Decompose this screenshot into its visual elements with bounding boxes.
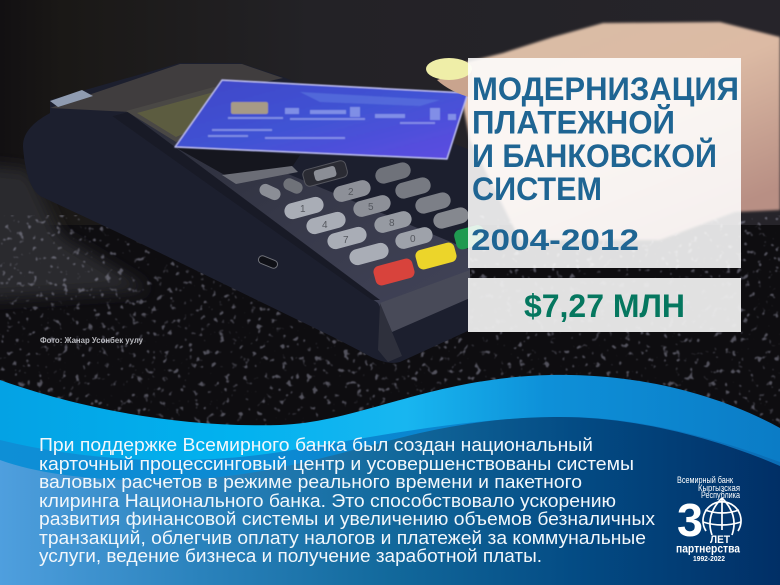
terminal keypad: 7 xyxy=(343,235,349,246)
fingernail xyxy=(426,58,472,80)
terminal keypad: 1 xyxy=(300,204,306,215)
logo: World Bank 30 years: Кыргызская xyxy=(698,483,740,493)
photo credit: Фото: Жанар Усонбек уулу xyxy=(40,335,143,345)
terminal top face xyxy=(112,110,470,330)
hand xyxy=(455,22,780,240)
terminal keypad: 2 xyxy=(348,187,354,198)
terminal lid xyxy=(50,64,283,112)
body text: развития финансовой системы и увеличению объемов безналичных xyxy=(39,508,656,529)
logo: World Bank 30 years xyxy=(676,475,741,563)
heading: И БАНКОВСКОЙ xyxy=(472,136,717,174)
body text: услуги, ведение бизнеса и получение заработной платы. xyxy=(39,545,542,566)
amount panel: $7,27 МЛН xyxy=(524,288,685,324)
amount panel xyxy=(468,278,741,332)
wave: mid blue band xyxy=(0,417,780,585)
wave: deep blue panel xyxy=(0,417,780,585)
globe icon xyxy=(703,498,741,535)
body text: транзакций, облегчив оплату налогов и платежей за коммунальные xyxy=(39,527,646,548)
logo: World Bank 30 years: 1992-2022 xyxy=(693,554,725,563)
terminal keypad: 5 xyxy=(368,202,374,213)
body text: При поддержке Всемирного банка был создан национальный xyxy=(39,434,593,455)
body text: валовых расчетов в режиме реального времени и пакетного xyxy=(39,471,582,492)
body text: клиринга Национального банка. Это способствовало ускорению xyxy=(39,490,616,511)
logo: World Bank 30 years: Всемирный банк xyxy=(677,475,733,485)
heading xyxy=(472,71,739,207)
terminal keypad: 4 xyxy=(322,220,328,231)
terminal keypad: 8 xyxy=(389,218,395,229)
logo: World Bank 30 years: партнерства xyxy=(676,544,741,556)
finger xyxy=(437,68,472,98)
body text xyxy=(39,434,656,566)
terminal body xyxy=(23,63,470,363)
heading: ПЛАТЕЖНОЙ xyxy=(472,102,675,140)
logo: World Bank 30 years: Республика xyxy=(701,490,740,500)
terminal keypad xyxy=(257,160,487,287)
big 3: 3 xyxy=(677,494,703,546)
card xyxy=(175,80,468,159)
title panel xyxy=(468,58,741,268)
heading: СИСТЕМ xyxy=(472,171,602,207)
years: 2004-2012 xyxy=(471,224,639,257)
logo: World Bank 30 years: ЛЕТ xyxy=(710,534,730,546)
heading: МОДЕРНИЗАЦИЯ xyxy=(472,71,739,107)
body text: карточный процессинговый центр и усовершенствованы системы xyxy=(39,453,634,474)
wave: bright cyan band xyxy=(0,375,780,585)
terminal keypad: 0 xyxy=(410,234,416,245)
